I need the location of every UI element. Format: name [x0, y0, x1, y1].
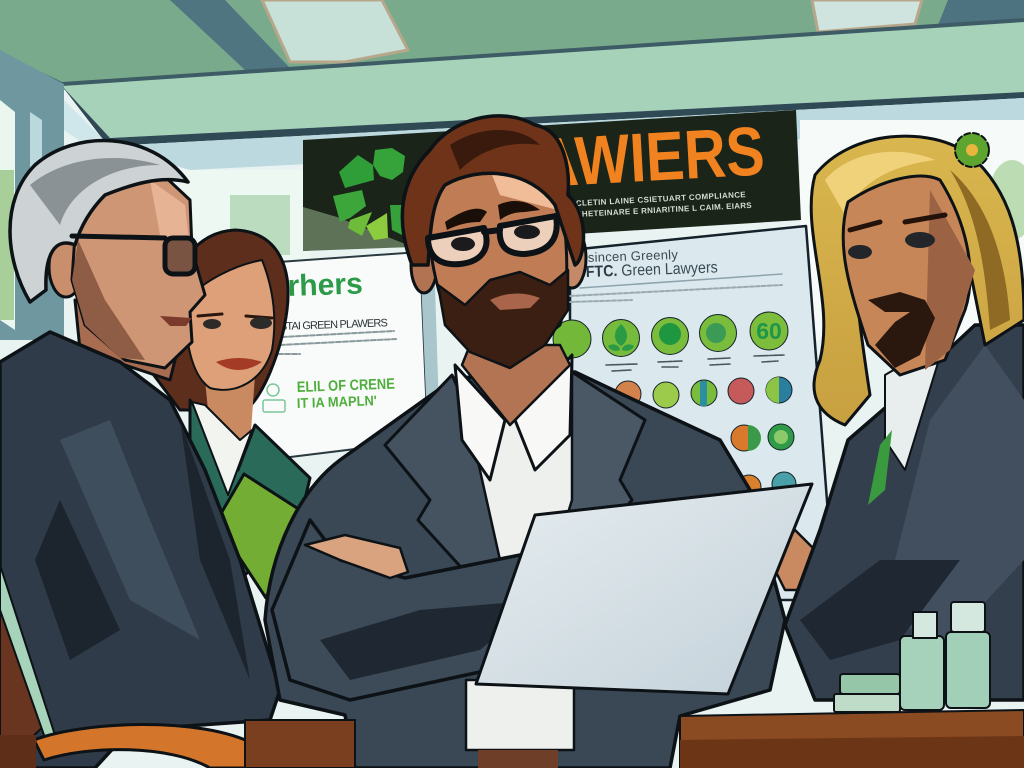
person: left older man: [0, 141, 280, 768]
flyer green slogan: [297, 376, 395, 411]
left man hair: [10, 141, 188, 302]
bottle two: [946, 602, 990, 708]
right person hand: [770, 530, 825, 590]
flyer body lines: [278, 331, 396, 354]
icon number 60: 60: [756, 318, 782, 344]
window: [0, 50, 1024, 340]
banner subtitle: [576, 190, 753, 219]
banner subtitle: CLETIN LAINE CSIETUART COMPLIANCE: [576, 190, 747, 208]
right person suit: [785, 325, 1024, 700]
icon captions: [606, 355, 784, 371]
woman neck: [205, 375, 255, 470]
center man hand: [305, 535, 408, 578]
left man face: [72, 172, 205, 368]
banner: LAWYERS sign: [303, 110, 801, 251]
icon row 1: [553, 312, 788, 358]
jar: [834, 674, 900, 712]
icon: green leaf wreath: [333, 148, 405, 240]
center man hair: [402, 116, 584, 265]
person: center bearded man: [265, 116, 785, 768]
bottle one: [900, 612, 944, 710]
woman face: [186, 260, 274, 390]
green book: [216, 474, 300, 598]
poster: Green Lawyers flyer: [250, 252, 440, 462]
poster heading: FTC. Green Lawyers: [586, 259, 718, 281]
banner title: AWIERS: [535, 112, 766, 202]
paper document: [476, 484, 812, 694]
flyer subheading: STAI GREEN PLAWERS: [280, 317, 388, 333]
pale green soffit: [62, 22, 1024, 138]
poster body lines: [570, 285, 782, 302]
center man crossed arm: [272, 520, 560, 700]
center man lower shirt and buckle: [466, 680, 574, 750]
bottles and jar: [834, 602, 990, 712]
woman hair: [150, 230, 288, 410]
poster heading: sincen Greenly: [588, 247, 679, 265]
person: woman with book: [150, 230, 310, 600]
center man ears: [411, 237, 437, 293]
center man beard: [438, 270, 568, 368]
banner subtitle: NHETEINARE E RNIARITINE L CAIM. EIARS: [576, 201, 753, 219]
center man shirt: [458, 360, 572, 560]
icon row 3: [731, 424, 796, 499]
poster heading: [586, 247, 718, 281]
left man neck: [75, 300, 180, 380]
left man ear: [49, 237, 83, 297]
center man face: [429, 166, 567, 365]
icon: gear: [955, 133, 989, 167]
center man glasses: [428, 216, 557, 264]
left man suit: [0, 332, 280, 768]
flyer green slogan: ELIL OF CRENE: [297, 376, 395, 396]
icon row 2: [615, 377, 792, 408]
center man jacket: [265, 372, 785, 768]
center man neck: [462, 345, 570, 425]
right person goatee: [868, 292, 935, 368]
right person shirt and tie: [885, 340, 945, 470]
table: [245, 710, 1024, 768]
ceiling: [0, 0, 1024, 90]
flyer green slogan: IT IA MAPLN': [297, 392, 377, 411]
person: right blond lawyer: [770, 133, 1024, 700]
right person face: [843, 176, 970, 375]
left man glasses: [72, 236, 195, 274]
poster: FTC Green Lawyers chart: [553, 226, 830, 600]
woman jacket: [190, 400, 310, 600]
chair left: [0, 565, 256, 768]
center man lapels: [385, 375, 500, 610]
right person hair: [811, 136, 1024, 425]
center man eyebrows: [445, 201, 540, 230]
flyer heading: rhers: [287, 267, 363, 303]
